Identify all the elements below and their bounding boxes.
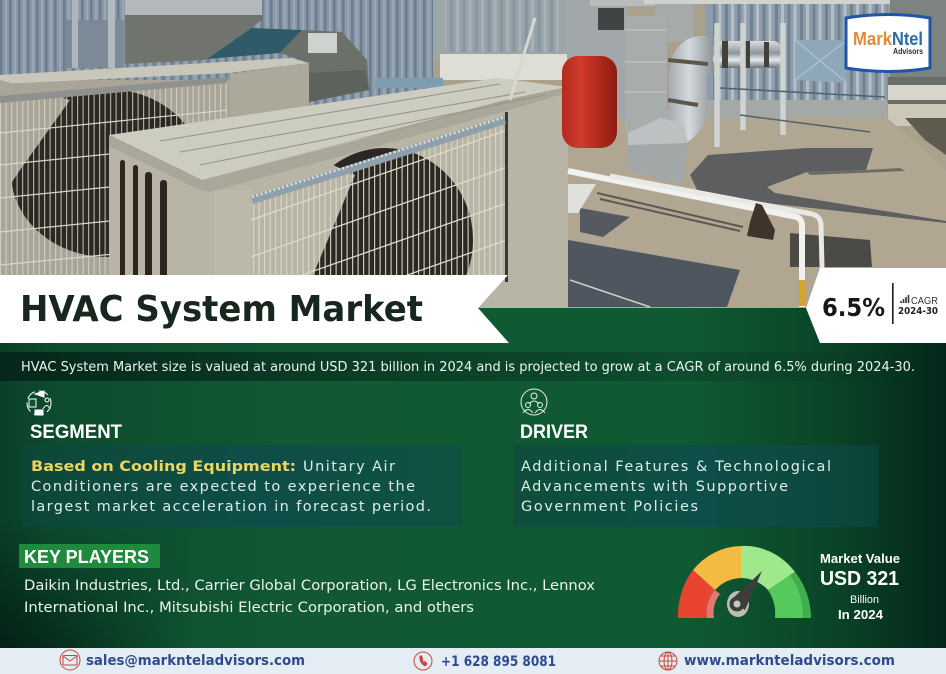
equipment on right: [655, 0, 693, 42]
CAGR badge: 2024-30: [898, 306, 938, 317]
logo: MarkNtel Advisors: [846, 14, 930, 72]
heading: segment: SEGMENT: [30, 422, 122, 443]
icon: segment: [27, 391, 51, 415]
panel: segment text: [22, 445, 462, 527]
icon: phone: [414, 652, 432, 670]
text: key players list: [24, 578, 595, 616]
intro band: HVAC System Market size is valued at around USD 321 billion in 2024 and is projected to grow at a CAGR of around 6.5% during 2024-30.: [21, 360, 915, 375]
logo: MarkNtel Advisors: Advisors: [893, 47, 923, 56]
panel: segment text: largest market acceleration in forecast period.: [31, 499, 431, 515]
icon: globe: [659, 652, 677, 670]
contact: phone: +1 628 895 8081: [441, 654, 556, 670]
footer bar: [0, 648, 946, 674]
front unit: [173, 110, 507, 310]
back duct: [66, 20, 124, 68]
logo: MarkNtel Advisors: Mark: [853, 29, 893, 49]
CAGR badge: [806, 268, 946, 343]
market value callout: Billion: [850, 594, 879, 606]
market value callout: Market Value: [820, 552, 900, 566]
panel: segment text: Conditioners are expected to experience the: [31, 479, 415, 495]
panel: driver text: [513, 445, 878, 527]
panel: driver text: Advancements with Supportive: [521, 479, 788, 495]
icon: email: [60, 650, 80, 670]
text: key players list: International Inc., Mitsubishi Electric Corporation, and others: [24, 600, 474, 616]
back unit: [0, 80, 309, 280]
panel: segment text: Unitary Air: [303, 459, 395, 475]
title ribbon: HVAC System Market: [20, 289, 423, 330]
market value callout: [820, 552, 900, 622]
icon: driver: [521, 389, 547, 415]
intro band: [0, 352, 946, 381]
panel: driver text: Government Policies: [521, 499, 698, 515]
title ribbon: [0, 275, 509, 343]
CAGR badge: CAGR: [911, 295, 938, 307]
contact: email: sales@marknteladvisors.com: [86, 653, 305, 669]
panel: segment text: Based on Cooling Equipment:: [31, 459, 296, 475]
market value callout: In 2024: [838, 608, 883, 622]
gauge chart: [678, 546, 811, 618]
logo: MarkNtel Advisors: Ntel: [892, 29, 923, 49]
photo: rooftop HVAC units: [0, 0, 946, 332]
panel: driver text: Additional Features & Technological: [521, 459, 831, 475]
market value callout: USD 321: [820, 568, 899, 590]
contact: website: www.marknteladvisors.com: [684, 653, 895, 669]
CAGR badge: 6.5%: [822, 293, 885, 322]
panel: green background: [0, 308, 946, 648]
heading: driver: DRIVER: [520, 422, 588, 443]
heading: key players: KEY PLAYERS: [24, 547, 149, 567]
pipes: [568, 171, 802, 307]
text: key players list: Daikin Industries, Ltd., Carrier Global Corporation, LG Electronics Inc., Lennox: [24, 578, 595, 594]
